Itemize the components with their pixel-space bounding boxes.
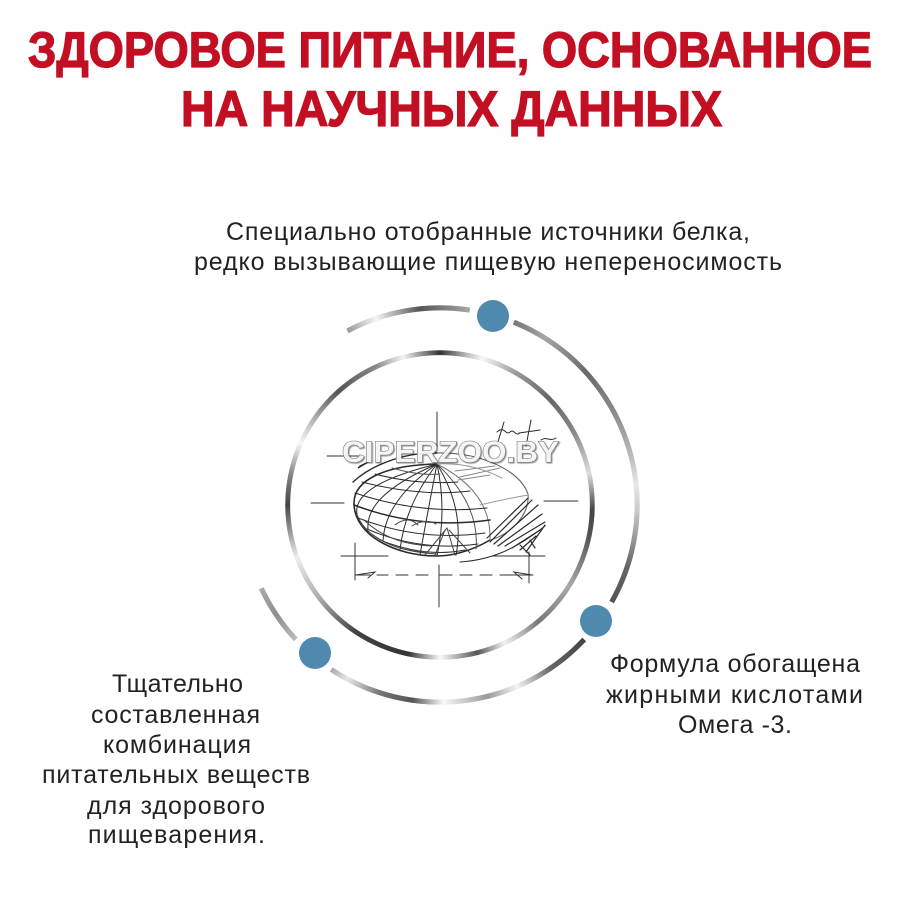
text block: omega-3: Омега -3.: [678, 711, 792, 739]
text block: digestion: составленная: [91, 701, 260, 729]
outer metallic ring segments: [240, 305, 640, 705]
parallels: [392, 468, 440, 474]
signature: [497, 420, 556, 446]
hatching: [487, 498, 545, 555]
watermark: CIPERZOO.BY: [342, 436, 559, 469]
text block: digestion: комбинация: [103, 731, 251, 759]
kibble outline: [354, 464, 490, 556]
text block: protein sources: Специально отобранные источники белка,: [226, 218, 750, 246]
highlights: [455, 466, 500, 480]
text block: digestion: для здорового: [87, 792, 265, 820]
title: [28, 22, 872, 137]
text block: protein sources: [194, 218, 782, 276]
text block: digestion: Тщательно: [112, 670, 243, 698]
text block: digestion: питательных веществ: [42, 761, 310, 789]
meridians: [437, 464, 490, 540]
crosshair guides: [311, 412, 578, 607]
text block: omega-3: Формула обогащена: [610, 650, 860, 678]
lower shading: [356, 512, 470, 555]
title: НА НАУЧНЫХ ДАННЫХ: [181, 81, 722, 137]
text block: digestion: пищеварения.: [88, 821, 265, 849]
inner metallic ring: [285, 350, 595, 660]
arc under kibble: [460, 526, 545, 562]
text block: protein sources: редко вызывающие пищевую непереносимость: [194, 248, 782, 276]
text block: omega-3: жирными кислотами: [606, 681, 863, 709]
